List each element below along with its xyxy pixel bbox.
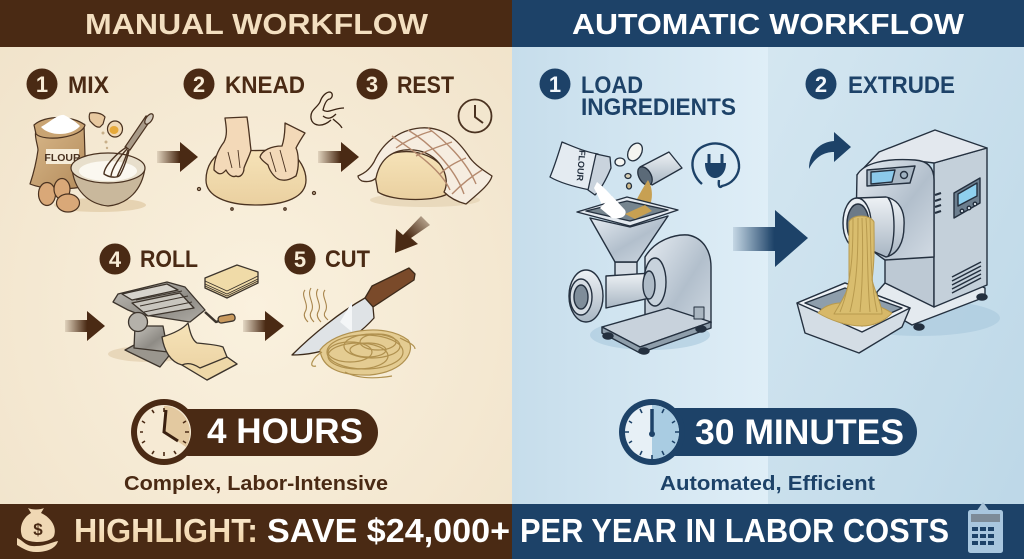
step label: 3 rest: REST [397,72,454,99]
icon: pasta rolling machine [108,265,258,380]
step label: 1 mix: MIX [68,72,109,99]
step label: 4 roll: ROLL [140,246,198,273]
step label: 1 load ingredients: 1 [549,72,561,97]
step label: 1 load ingredients [540,68,736,121]
caption: complex, labor-intensive: Complex, Labor-Intensive [124,473,388,495]
panel: manual workflow background [0,0,512,559]
banner: highlight savings: PER YEAR IN LABOR COSTS [520,512,949,549]
step label: 2 knead: 2 [193,72,205,97]
step label: 4 roll [100,244,198,274]
step label: 2 extrude: EXTRUDE [848,72,955,99]
banner: highlight savings [0,502,1024,559]
step label: 1 mix [26,68,109,100]
icon: flour sack, eggs and mixing bowl [30,112,155,212]
heading: manual workflow [0,0,512,47]
icon: flour sack, eggs and mixing bowl: FLOUR [44,152,81,164]
icon: extruder machine with noodles and tray [797,130,1000,353]
step label: 2 extrude [806,68,955,100]
step label: 2 knead: KNEAD [225,72,305,99]
icon: stopwatch clock [619,399,685,465]
icon: dough resting under towel with clock [358,100,492,207]
badge: 4 hours [131,399,378,465]
arrow: knead to rest [318,142,359,172]
step label: 4 roll: 4 [109,247,122,272]
step label: 5 cut [284,244,370,274]
heading: automatic workflow: AUTOMATIC WORKFLOW [572,9,965,41]
step label: 2 knead [184,68,305,100]
panel: automatic workflow background [512,0,1024,559]
arrow: mix to knead [157,142,198,172]
arrow: rest to roll [395,216,430,253]
heading: automatic workflow [512,0,1024,47]
badge: 30 minutes [619,399,917,465]
icon: clock [131,399,197,465]
step label: 5 cut: CUT [325,246,370,273]
icon: grinder machine with hopper [569,196,711,354]
icon: knife cutting noodles [292,268,415,378]
icon: hands kneading dough [198,117,316,210]
icon: money bag in hand [17,508,58,552]
banner: highlight savings: SAVE $24,000+ [267,512,510,549]
icon: flexed arm muscle [311,92,344,128]
step label: 1 mix: 1 [36,72,48,97]
icon: flour bag and containers pouring ingredients [550,141,682,221]
step label: 3 rest [356,68,454,100]
badge: 30 minutes: 30 MINUTES [695,413,904,452]
arrow: load to extrude [733,210,808,267]
step label: 2 extrude: 2 [815,72,827,97]
heading: manual workflow: MANUAL WORKFLOW [85,9,429,41]
arrow: into roll [65,311,105,341]
step label: 3 rest: 3 [366,72,378,97]
icon: power plug [692,143,739,187]
step label: 1 load ingredients: LOAD [581,72,643,99]
icon: flour bag and containers pouring ingredients: FLOUR [575,150,587,182]
step label: 1 load ingredients: INGREDIENTS [581,94,736,121]
icon: calculator [968,502,1003,553]
caption: automated, efficient: Automated, Efficient [660,473,875,495]
banner: highlight savings: HIGHLIGHT: [74,512,258,549]
badge: 4 hours: 4 HOURS [207,412,363,451]
icon: curved arrow [809,132,851,169]
arrow: roll to cut [243,311,284,341]
step label: 5 cut: 5 [294,247,306,272]
icon: money bag in hand: $ [33,520,43,539]
